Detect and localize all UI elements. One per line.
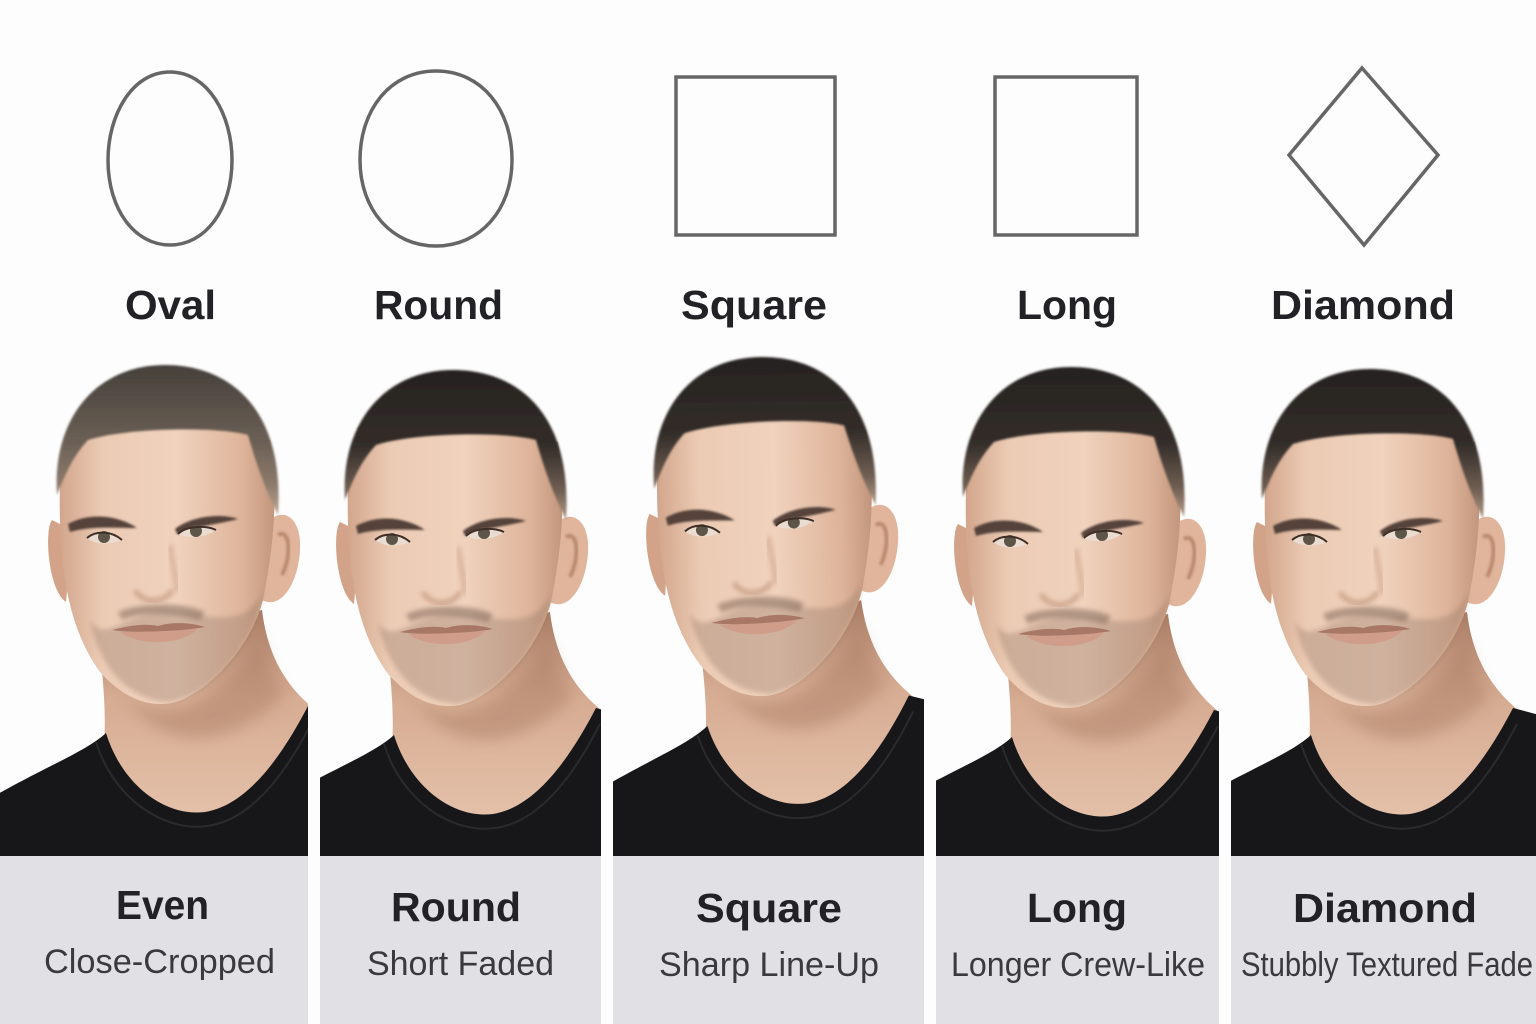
caption panel: even bbox=[0, 856, 308, 1024]
heading: Oval: Oval bbox=[125, 282, 216, 328]
icon: square outline bbox=[676, 77, 835, 235]
column: oval bbox=[108, 72, 232, 328]
caption subtitle: Sharp Line-Up: Sharp Line-Up bbox=[659, 946, 879, 984]
caption title: Even: Even bbox=[116, 882, 209, 928]
caption title: Square: Square bbox=[696, 885, 842, 931]
caption title: Long: Long bbox=[1027, 885, 1127, 931]
caption title: Diamond: Diamond bbox=[1293, 885, 1477, 931]
icon: round outline bbox=[360, 71, 512, 246]
caption panel: square bbox=[613, 856, 924, 1024]
caption panel: long bbox=[936, 856, 1219, 1024]
column: round bbox=[360, 71, 512, 328]
column: long bbox=[995, 77, 1137, 328]
heading: Square: Square bbox=[681, 282, 827, 328]
portrait: round short faded bbox=[320, 368, 601, 856]
portrait: long longer crew-like bbox=[936, 365, 1219, 856]
portrait: even close-cropped bbox=[0, 363, 308, 856]
heading: Round: Round bbox=[374, 282, 503, 328]
column: square bbox=[676, 77, 835, 328]
heading: Diamond: Diamond bbox=[1271, 282, 1455, 328]
portrait: square sharp line-up bbox=[613, 355, 924, 856]
icon: diamond outline bbox=[1289, 68, 1438, 245]
heading: Long: Long bbox=[1017, 282, 1117, 328]
caption title: Round: Round bbox=[391, 884, 521, 930]
column: diamond bbox=[1271, 68, 1455, 328]
portrait: diamond stubbly textured fade bbox=[1231, 367, 1536, 856]
caption subtitle: Longer Crew-Like: Longer Crew-Like bbox=[951, 946, 1205, 984]
icon: long outline bbox=[995, 77, 1137, 235]
caption subtitle: Short Faded: Short Faded bbox=[367, 945, 554, 983]
caption panel: diamond bbox=[1231, 856, 1536, 1024]
caption panel: round bbox=[320, 856, 601, 1024]
caption subtitle: Close-Cropped: Close-Cropped bbox=[44, 943, 275, 981]
icon: oval outline bbox=[108, 72, 232, 245]
